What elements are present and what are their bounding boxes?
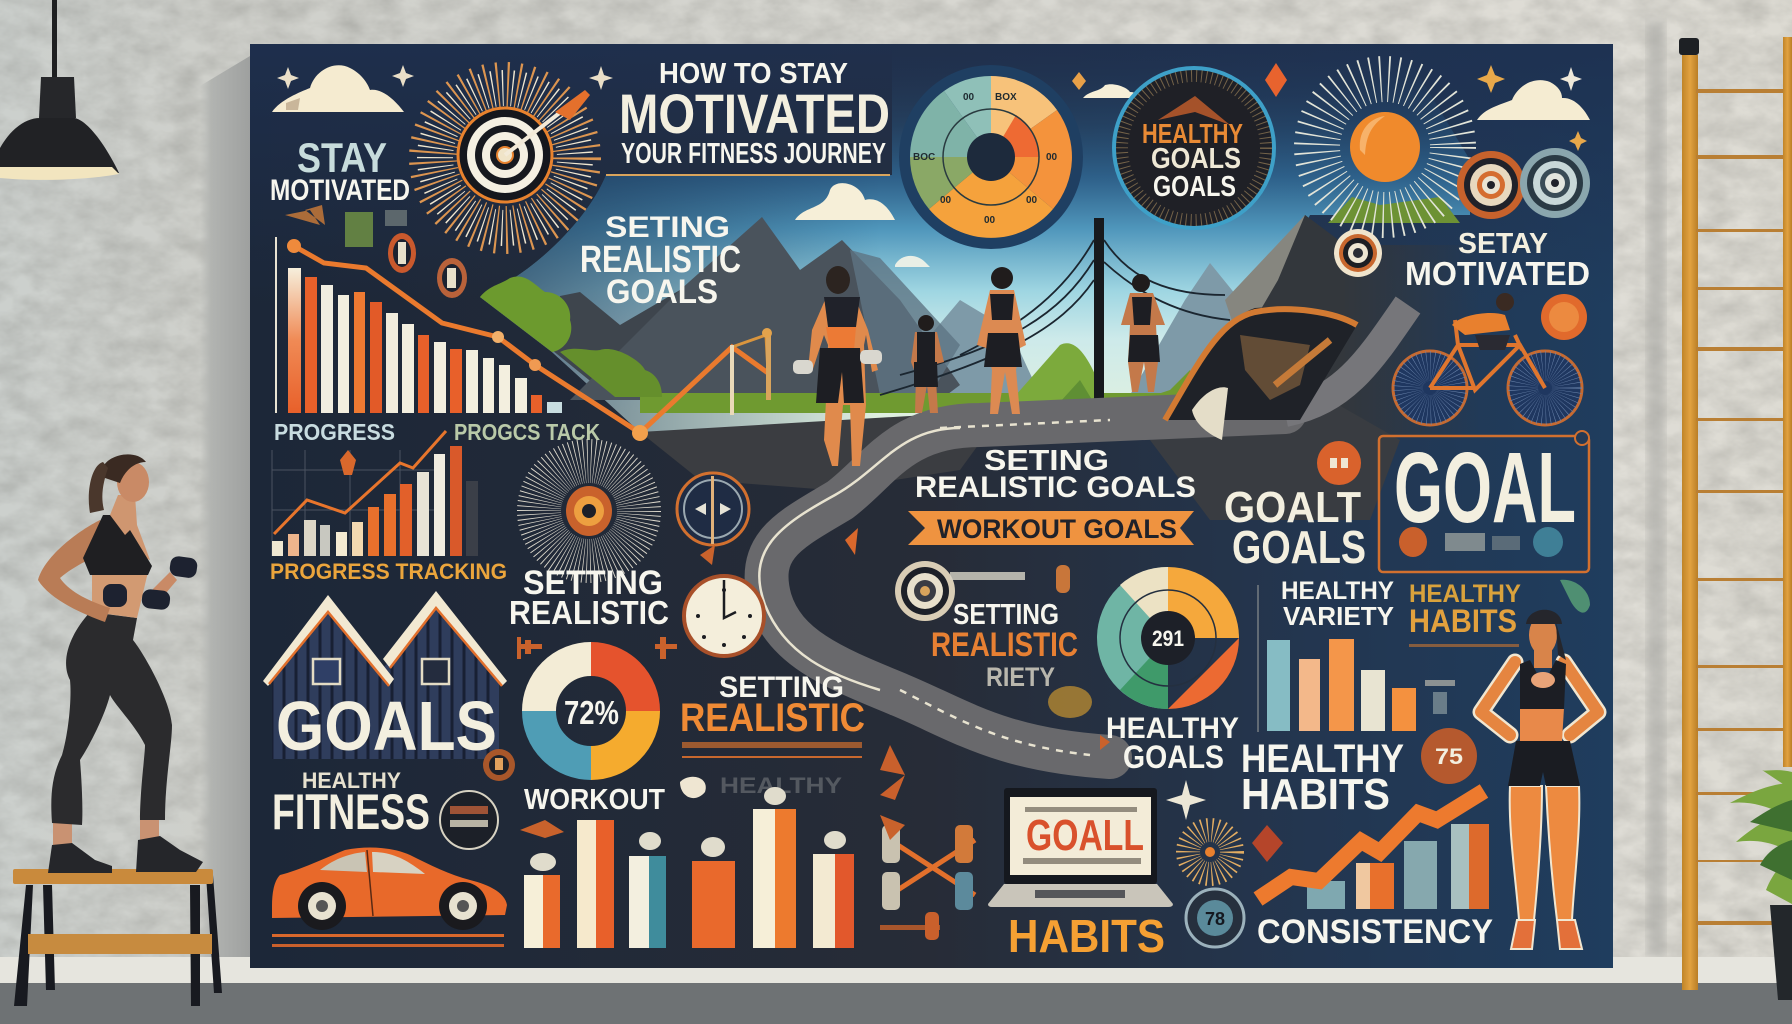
heading: setting realistic, orange: REALISTIC <box>680 696 865 740</box>
growth arrow chart <box>1258 791 1489 909</box>
heading: goalt goals: GOALS <box>1232 521 1366 573</box>
bar chart: progress decline <box>275 237 562 413</box>
poster board <box>250 44 1613 968</box>
laptop: GOALL <box>1026 811 1144 860</box>
heading: setting realistic variety: SETTING <box>953 599 1059 631</box>
orange trend line <box>287 239 772 441</box>
heading: setting realistic, orange: SETTING <box>719 671 844 704</box>
heading: setay motivated: SETAY <box>1458 228 1548 260</box>
score ball <box>1421 728 1477 784</box>
heading: healthy fitness: FITNESS <box>272 784 430 840</box>
heading: workout: WORKOUT <box>524 784 665 816</box>
heading: setting realistic goals, sky <box>580 211 741 311</box>
clouds in scene <box>795 84 1142 267</box>
heading: setting realistic, left: REALISTIC <box>509 594 669 631</box>
sun with rays <box>1317 79 1453 215</box>
dumbbells cluster <box>880 745 975 940</box>
dark road base and textured ground <box>640 400 1400 520</box>
trees and ground <box>480 276 1210 413</box>
target with sunburst <box>433 86 590 230</box>
orange disc <box>1541 294 1587 340</box>
title: YOUR FITNESS JOURNEY <box>621 138 886 170</box>
pie chart wheel: BOX <box>995 92 1017 103</box>
orange badge small <box>483 749 515 781</box>
heading: stay motivated <box>270 134 410 207</box>
heading: habits: HABITS <box>1008 910 1165 962</box>
chart: progress tracking: PROGRESS <box>274 419 395 445</box>
second figure <box>977 267 1026 414</box>
pie chart wheel: 00 <box>1026 195 1038 206</box>
sparkle <box>1166 780 1206 820</box>
heading: healthy habits: HABITS <box>1241 770 1390 819</box>
heading: setting realistic goals, sky: REALISTIC <box>580 239 741 281</box>
heading: healthy goals <box>1106 712 1239 775</box>
score ball: 75 <box>1435 744 1463 769</box>
decorative icons left <box>285 205 407 247</box>
heading: setting realistic, left <box>509 564 669 631</box>
bench <box>13 869 222 1006</box>
bar chart: healthy variety: HEALTHY <box>1281 577 1394 605</box>
pie chart wheel <box>899 65 1083 249</box>
heading: consistency: CONSISTENCY <box>1257 913 1493 951</box>
heading: setting realistic, left: SETTING <box>523 564 663 602</box>
diamond icon <box>1252 825 1283 862</box>
heading: healthy habits orange <box>1409 580 1521 647</box>
heading: setay motivated: MOTIVATED <box>1405 255 1590 292</box>
bar chart: healthy variety <box>1257 577 1416 732</box>
mountains <box>552 197 1480 440</box>
heading: setting realistic variety: RIETY <box>986 662 1055 692</box>
title <box>606 58 890 176</box>
sunburst eye <box>539 461 639 561</box>
heading: goalt goals <box>1224 483 1366 573</box>
heading: healthy habits orange: HABITS <box>1409 603 1517 639</box>
main figure <box>793 266 882 466</box>
pie chart wheel: 00 <box>984 215 996 226</box>
hanging lamp <box>0 0 119 180</box>
wooden ladder <box>1679 37 1792 990</box>
heading: setting realistic goals, sky: GOALS <box>606 273 718 311</box>
woman standing, hands on hips <box>1481 610 1598 949</box>
heading: setting realistic goals, centre: REALISTIC GOALS <box>915 471 1196 504</box>
heading: stay motivated: MOTIVATED <box>270 174 410 207</box>
laptop <box>988 788 1173 907</box>
heading: healthy goals: GOALS <box>1123 739 1224 775</box>
bar chart: workout <box>524 787 854 948</box>
title: MOTIVATED <box>619 82 890 145</box>
badge: healthy goals: GOALS <box>1153 171 1236 203</box>
figure <box>38 454 203 873</box>
pie chart wheel: 00 <box>1046 152 1058 163</box>
cloud top right <box>1477 65 1590 151</box>
third figure <box>1121 274 1165 392</box>
badge: healthy goals: GOALS <box>1151 143 1241 175</box>
swirl discs <box>1457 148 1590 219</box>
heading: stay motivated: STAY <box>297 134 387 181</box>
round number badge: 78 <box>1205 909 1225 929</box>
heading: healthy fitness: HEALTHY <box>302 768 401 793</box>
banner: workout goals: WORKOUT GOALS <box>937 514 1177 544</box>
heading: setting realistic goals, centre <box>915 445 1196 504</box>
runner figures in scene <box>793 266 1165 466</box>
medallion icons <box>388 233 467 298</box>
chart: progress tracking: PROGRESS TRACKING <box>270 559 507 584</box>
bar chart: healthy variety: VARIETY <box>1283 601 1394 631</box>
heading: healthy fitness <box>272 768 430 840</box>
heading: healthy goals: HEALTHY <box>1106 712 1239 745</box>
donut chart 72%: 72% <box>564 694 619 731</box>
bicycle with rider <box>1393 293 1582 425</box>
star <box>1072 63 1287 97</box>
chart: progress tracking <box>270 419 600 584</box>
heading: setting realistic variety <box>931 599 1092 718</box>
heading: healthy habits: HEALTHY <box>1241 737 1404 781</box>
dumbbell icons <box>517 637 677 659</box>
heading: healthy habits <box>1241 737 1404 819</box>
heading: goalt goals: GOALT <box>1224 483 1361 532</box>
title: HOW TO STAY <box>659 58 848 90</box>
houses <box>263 591 507 765</box>
misc decorative icons <box>520 528 1590 840</box>
pie chart wheel: 00 <box>963 92 975 103</box>
dial chart 2 <box>1097 567 1239 709</box>
orange face icon <box>1317 441 1361 485</box>
heading: setting realistic variety: REALISTIC <box>931 626 1078 664</box>
target icon <box>1334 229 1382 277</box>
badge: healthy goals: HEALTHY <box>1142 118 1243 149</box>
donut chart 72% <box>539 659 643 763</box>
badge: healthy goals <box>1114 68 1274 228</box>
heading: setting realistic goals, centre: SETING <box>984 445 1109 477</box>
panel: goal box <box>1379 431 1589 572</box>
round stamp badge <box>440 791 498 849</box>
houses: GOALS <box>276 687 497 765</box>
sky scene <box>480 44 1480 440</box>
heading: setting realistic goals, sky: SETING <box>605 211 730 244</box>
target icon mid <box>895 561 1070 621</box>
chart: progress tracking: PROGCS TACK <box>454 419 600 445</box>
pie chart wheel: BOC <box>913 152 935 163</box>
dial chart 2: 291 <box>1152 626 1184 651</box>
heading: setay motivated <box>1405 228 1590 292</box>
clock <box>684 576 764 656</box>
small figure <box>911 315 944 413</box>
compass icon <box>677 473 749 545</box>
potted plant <box>1730 770 1792 1000</box>
tunnel cave <box>1165 307 1357 440</box>
pie chart wheel: 00 <box>940 195 952 206</box>
utility pole and wires <box>880 218 1230 413</box>
woman with dumbbells on bench <box>13 454 222 1006</box>
cloud top left <box>272 65 613 112</box>
heading: setting realistic, orange <box>680 671 865 798</box>
round number badge <box>1186 889 1244 947</box>
heading: setting realistic, orange: HEALTHY <box>720 773 842 798</box>
small sunburst <box>1188 830 1232 874</box>
winding road <box>759 305 1408 757</box>
panel: goal box: GOAL <box>1394 432 1576 544</box>
orange car <box>272 848 507 947</box>
heading: healthy habits orange: HEALTHY <box>1409 580 1521 608</box>
